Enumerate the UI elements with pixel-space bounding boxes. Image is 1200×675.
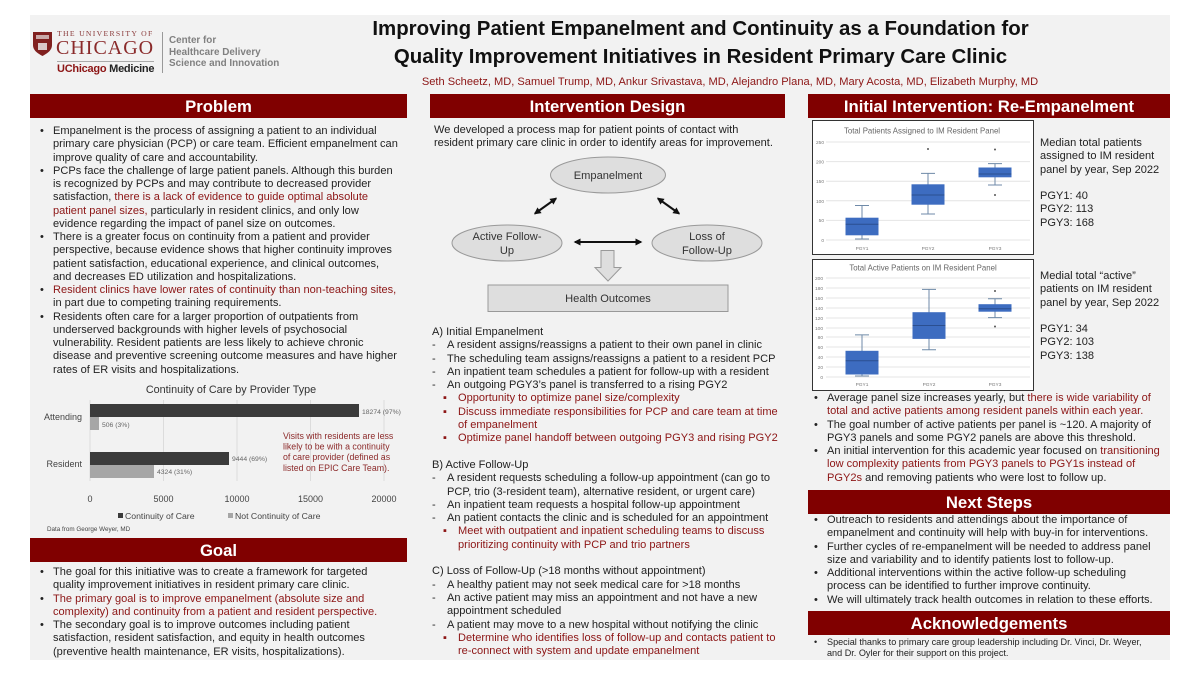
goal bullet list: complexity) and continuity from a patient and resident perspective. [53,606,377,618]
chart: total patients box plot: 100 [816,199,824,205]
intervention steps text: Discuss immediate responsibilities for PCP and care team at time [458,406,778,418]
chart: total patients box plot: PGY2 [922,246,935,252]
problem bullet list: rates of ER visits and hospitalizations. [53,364,239,376]
intervention steps text: An patient contacts the clinic and is scheduled for an appointment [447,512,768,524]
center name: Center for [169,35,216,46]
chart: total patients box plot: 0 [821,238,824,244]
acknowledgements text: Special thanks to primary care group leadership including Dr. Vinci, Dr. Weyer, [827,636,1142,646]
intervention steps text: PCP, trio (3-resident team), alternative resident, or urgent care) [447,486,755,498]
bar chart: continuity of care: 0 [87,494,93,504]
problem bullet list: PCPs face the challenge of large patient panels. Although this burden [53,165,393,177]
panel: goal [30,538,407,658]
chart: active patients box plot: 100 [815,326,823,332]
chart: active patients box plot: 180 [815,286,823,292]
intervention steps text: Determine who identifies loss of follow-up and contacts patient to [458,632,775,644]
chart: total patients box plot: PGY3 [989,246,1002,252]
bar chart: continuity of care: 20000 [371,494,397,504]
chart: active patients box plot: 140 [815,306,823,312]
university name: THE UNIVERSITY OF [57,29,154,38]
active panel sizes text: PGY2: 103 [1040,336,1094,348]
next steps bullet list: size and variability and to identify patients lost to follow-up. [827,554,1114,566]
chart title: Continuity of Care by Provider Type [146,384,316,396]
intervention steps text: C) Loss of Follow-Up (>18 months without appointment) [432,565,706,577]
title: Improving Patient Empanelment and Continuity as a Foundation for [372,17,1029,40]
intro text [434,124,773,149]
intervention bullet list [814,392,1160,484]
bar chart: continuity of care: Attending [44,412,82,422]
intervention steps text: A) Initial Empanelment [432,326,543,338]
problem bullet list: evidence regarding the impact of panel size on outcomes. [53,218,335,230]
heading: problem: Problem [185,97,252,116]
node: active follow-up: Active Follow- [472,231,542,243]
goal bullet list: quality improvement initiatives in resident primary care clinic. [53,579,350,591]
median panel sizes text: Median total patients [1040,137,1142,149]
intervention steps text: A resident assigns/reassigns a patient to their own panel in clinic [447,339,762,351]
chart: active patients box plot [812,260,1034,390]
median panel sizes text: panel by year, Sep 2022 [1040,164,1159,176]
acknowledgements text [814,636,1142,658]
problem bullet list [40,125,398,376]
chart: active patients box plot: 120 [815,316,823,322]
bar chart: continuity of care: 10000 [224,494,250,504]
heading: next steps: Next Steps [946,493,1032,512]
bar chart: continuity of care: Resident [46,459,82,469]
legend [118,511,321,521]
next steps bullet list [814,514,1153,606]
next steps bullet list: process can be identified to further improve continuity. [827,580,1091,592]
intro text: We developed a process map for patient points of contact with [434,124,738,136]
problem bullet list: satisfaction, there is a lack of evidence to guide optimal absolute [53,191,368,203]
heading: goal: Goal [200,541,237,560]
active panel sizes text [1040,270,1159,362]
panel: next steps [808,490,1170,606]
intervention steps text: re-connect with system and update empanelment [458,645,699,657]
legend: Not Continuity of Care [235,511,321,521]
median panel sizes text: PGY1: 40 [1040,190,1088,202]
active panel sizes text: PGY3: 138 [1040,350,1094,362]
intervention steps text: appointment scheduled [447,605,561,617]
heading: initial intervention: Initial Intervention: Re-Empanelment [844,97,1134,116]
problem bullet list: Empanelment is the process of assigning a patient to an individual [53,125,377,137]
chart callout: listed on EPIC Care Team). [283,463,389,473]
bar chart: continuity of care: 15000 [298,494,323,504]
center name: Healthcare Delivery [169,47,261,58]
authors: Seth Scheetz, MD, Samuel Trump, MD, Ankur Srivastava, MD, Alejandro Plana, MD, Mary Acosta, MD, Elizabeth Murphy, MD [422,76,1038,88]
chart: total patients box plot: PGY1 [856,246,869,252]
intervention steps text: prioritizing continuity with PCP and trio partners [458,539,690,551]
intro text: resident primary care clinic in order to identify areas for improvement. [434,137,773,149]
chart callout: likely to be with a continuity [283,442,390,452]
problem bullet list: in part due to competing training requirements. [53,297,281,309]
intervention steps text: Opportunity to optimize panel size/complexity [458,392,680,404]
median panel sizes text: PGY2: 113 [1040,203,1093,215]
bar chart: continuity of care: 18274 (97%) [362,409,401,416]
bar chart: continuity of care [44,384,401,533]
goal bullet list: (preventive health maintenance, ER visits, hospitalizations). [53,646,345,658]
intervention bullet list: PGY3 panels and some PGY2 panels are above this threshold. [827,432,1136,444]
chart: total patients box plot [812,120,1034,391]
problem bullet list: primary care physician (PCP) or care team. Efficient empanelment can [53,138,398,150]
intervention bullet list: low complexity patients from PGY3 panels to PGY1s instead of [827,458,1135,470]
chart: active patients box plot: 0 [820,375,823,381]
chart: active patients box plot: Total Active Patients on IM Resident Panel [849,264,997,272]
intervention steps text: A resident requests scheduling a follow-up appointment (can go to [447,472,770,484]
process map diagram [452,156,762,312]
panel: intervention design [430,94,785,657]
title [372,17,1029,68]
node: active follow-up: Up [500,245,514,257]
arrow: down to outcomes [595,250,621,281]
goal bullet list: The primary goal is to improve empanelment (absolute size and [53,592,364,604]
heading: goal [30,538,407,562]
node: empanelment [550,157,666,193]
chart callout: Visits with residents are less [283,431,394,441]
next steps bullet list: Outreach to residents and attendings about the importance of [827,514,1127,526]
active panel sizes text: panel by year, Sep 2022 [1040,296,1159,308]
intervention steps text: A patient may move to a new hospital without notifying the clinic [447,619,758,631]
heading: intervention design [430,94,785,118]
problem bullet list: is recognized by PCPs and may contribute to decreased provider [53,178,371,190]
intervention steps text: The scheduling team assigns/reassigns a patient to a resident PCP [447,353,776,365]
bar chart: continuity of care: 506 (3%) [102,422,130,429]
intervention steps text: An outgoing PGY3’s panel is transferred to a rising PGY2 [447,379,727,391]
goal bullet list: satisfaction, resident satisfaction, and equity in health outcomes [53,632,365,644]
intervention bullet list: The goal number of active patients per panel is ~120. A majority of [827,418,1151,430]
panel: problem [30,94,407,533]
intervention steps text: An active patient may miss an appointment and not have a new [447,592,757,604]
acknowledgements text: and Dr. Oyler for their support on this project. [827,648,1008,658]
chart: active patients box plot: 60 [818,345,823,351]
heading: problem [30,94,407,118]
intervention steps text: An inpatient team schedules a patient for follow-up with a resident [447,366,769,378]
node: active follow-up [452,225,562,261]
UChicago Medicine: UChicago Medicine [57,63,154,75]
heading: intervention design: Intervention Design [530,97,685,116]
chart: total patients box plot: 200 [816,160,824,166]
next steps bullet list: Additional interventions within the active follow-up scheduling [827,567,1126,579]
next steps bullet list: empanelment and continuity will help with buy-in for interventions. [827,527,1148,539]
intervention steps text: A healthy patient may not seek medical care for >18 months [447,579,740,591]
chart: total patients box plot: 50 [819,218,824,224]
problem bullet list: There is a greater focus on continuity from a patient and provider [53,231,370,243]
next steps bullet list: We will ultimately track health outcomes in relation to these efforts. [827,594,1153,606]
intervention bullet list: Average panel size increases yearly, but there is wide variability of [827,392,1151,404]
chart source: Data from George Weyer, MD [47,526,131,533]
box: health outcomes [488,285,728,312]
box: health outcomes: Health Outcomes [565,293,651,305]
panel: initial intervention [808,94,1170,484]
chart: active patients box plot: 160 [815,296,823,302]
median panel sizes text: PGY3: 168 [1040,216,1094,228]
center name: Science and Innovation [169,58,279,69]
bar chart: continuity of care: 9444 (69%) [232,456,267,463]
problem bullet list: vulnerability. Resident patients are less likely to achieve chronic [53,337,364,349]
problem bullet list: underserved backgrounds with higher levels of psychosocial [53,324,347,336]
legend: Continuity of Care [125,511,195,521]
intervention steps text: of empanelment [458,419,537,431]
intervention steps text: B) Active Follow-Up [432,459,528,471]
panel: acknowledgements [808,611,1170,658]
problem bullet list: Residents often care for a larger proportion of outpatients from [53,310,358,322]
node: loss of follow-up: Loss of [689,231,726,243]
chart: active patients box plot: 40 [818,355,823,361]
goal bullet list [40,566,377,658]
chart: active patients box plot: 200 [815,276,823,282]
chart callout [283,431,394,473]
problem bullet list: patient satisfaction, educational experience, and clinical outcomes, [53,258,379,270]
Chicago wordmark: CHICAGO [56,37,154,59]
title: Quality Improvement Initiatives in Resident Primary Care Clinic [394,45,1007,68]
chart: active patients box plot: PGY2 [923,382,936,388]
intervention steps text [432,326,778,657]
intervention bullet list: total and active patients among resident panels within each year. [827,405,1143,417]
chart: total patients box plot: Total Patients Assigned to IM Resident Panel [844,126,1000,136]
chart: active patients box plot: 80 [818,335,823,341]
chart: total patients box plot: 150 [816,179,824,185]
intervention steps text: Meet with outpatient and inpatient scheduling teams to discuss [458,525,764,537]
heading: next steps [808,490,1170,514]
intervention bullet list: PGY2s and removing patients who were lost to follow up. [827,472,1106,484]
problem bullet list: patient panel sizes, particularly in resident clinics, and only low [53,204,359,216]
median panel sizes text [1040,137,1159,228]
node: loss of follow-up [652,225,762,261]
logo: University of Chicago [33,29,279,75]
heading: acknowledgements: Acknowledgements [911,614,1067,633]
problem bullet list: perspective, because evidence shows that higher continuity improves [53,244,392,256]
median panel sizes text: assigned to IM resident [1040,150,1154,162]
intervention steps text: An inpatient team requests a hospital follow-up appointment [447,499,740,511]
goal bullet list: The secondary goal is to improve outcomes including patient [53,619,350,631]
active panel sizes text: PGY1: 34 [1040,323,1088,335]
next steps bullet list: Further cycles of re-empanelment will be needed to address panel [827,540,1151,552]
problem bullet list: Resident clinics have lower rates of continuity than non-teaching sites, [53,284,396,296]
icon: shield [33,32,52,56]
chart: active patients box plot: PGY3 [989,382,1002,388]
heading: acknowledgements [808,611,1170,635]
problem bullet list: disease and preventive screening outcome measures and have higher [53,350,397,362]
bar chart: continuity of care: 4324 (31%) [157,469,192,476]
goal bullet list: The goal for this initiative was to create a framework for targeted [53,566,367,578]
arrows between nodes [535,198,679,242]
chart: active patients box plot: PGY1 [856,382,869,388]
active panel sizes text: Medial total “active” [1040,270,1136,282]
active panel sizes text: patients on IM resident [1040,283,1152,295]
center name [162,32,279,73]
problem bullet list: improve quality of care and accountability. [53,152,258,164]
intervention bullet list: An initial intervention for this academic year focused on transitioning [827,445,1160,457]
chart callout: of care provider (defined as [283,452,391,462]
bar chart: continuity of care: 5000 [153,494,174,504]
problem bullet list: and decreases ED utilization and hospitalizations. [53,271,296,283]
chart: total patients box plot: 250 [816,140,824,146]
node: loss of follow-up: Follow-Up [682,245,732,257]
chart: active patients box plot: 20 [818,365,823,371]
heading: initial intervention [808,94,1170,118]
node: empanelment: Empanelment [574,170,642,182]
intervention steps text: Optimize panel handoff between outgoing PGY3 and rising PGY2 [458,432,778,444]
